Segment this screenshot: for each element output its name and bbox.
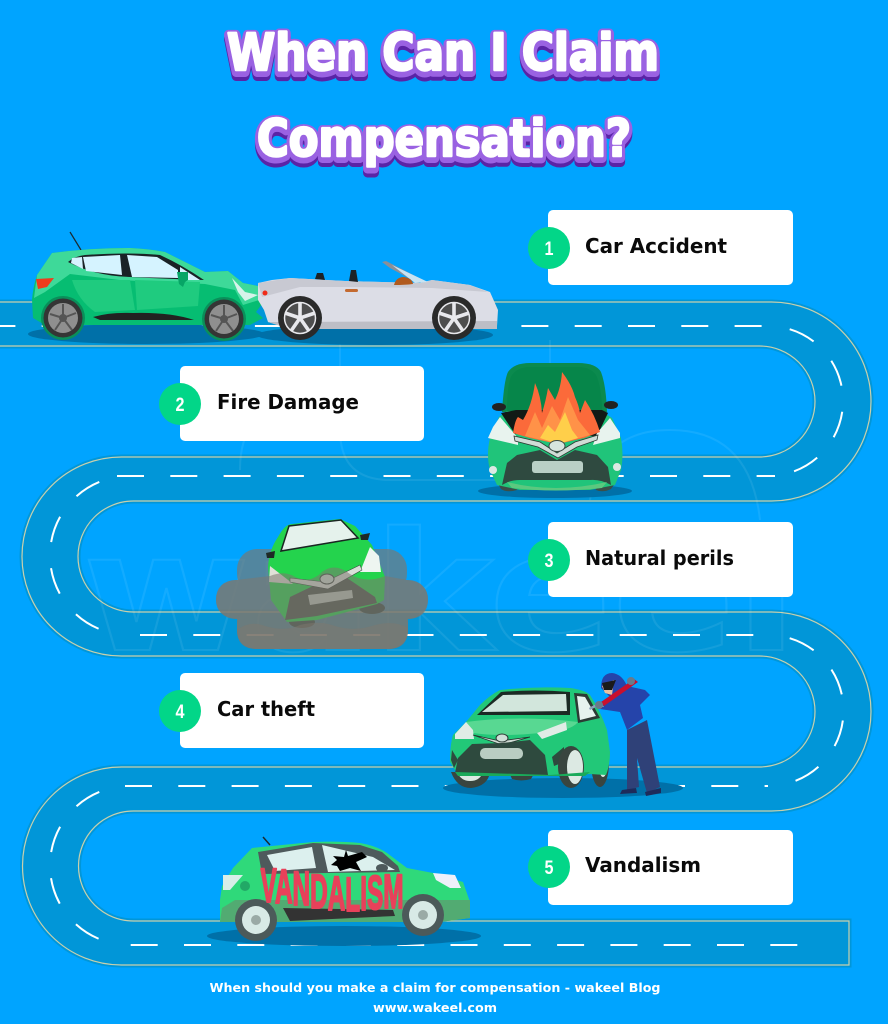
title [227,24,659,175]
graffiti: VANDALISM [260,860,404,922]
watermark: wakeel [82,497,798,689]
shattered window hole [331,850,367,871]
title line 2: Compensation? [257,112,631,171]
label 4: Car theft: Car theft [217,697,315,721]
label 2: Fire Damage [159,366,424,441]
flames [513,372,600,444]
illustration: green hatchback rear-ending grey convertible [28,232,498,345]
car [450,687,610,788]
title line 2: Compensation? [257,116,631,175]
label 3: Natural perils [528,522,793,597]
label 1: Car Accident: 1 [544,239,554,260]
label 2: Fire Damage: 2 [176,395,184,416]
label 5: Vandalism: 5 [544,858,554,879]
thief [589,673,661,796]
title line 1: When Can I Claim [227,24,659,83]
grey convertible [258,261,498,340]
footer: When should you make a claim for compensation - wakeel Blog [210,980,660,995]
label 4: Car theft: 4 [176,702,185,723]
smoke behind [216,549,428,649]
smoke front [216,567,428,649]
label 1: Car Accident [528,210,793,285]
illustration: vandalised car [207,837,481,946]
label 3: Natural perils: Natural perils [585,546,734,570]
label 3: Natural perils: 3 [544,551,554,572]
footer [210,980,660,1015]
road [0,302,871,965]
label 2: Fire Damage: Fire Damage [217,390,359,414]
title line 1: When Can I Claim [227,26,659,85]
label 5: Vandalism: Vandalism [585,853,701,877]
footer: www.wakeel.com [373,1000,497,1015]
title line 2: Compensation? [257,110,631,169]
illustration: thief breaking into car [443,673,683,798]
illustration: car with burning engine [478,363,632,498]
label 5: Vandalism [528,830,793,905]
green car [32,232,263,341]
label 1: Car Accident: Car Accident [585,234,727,258]
title line 1: When Can I Claim [227,30,659,89]
watermark [82,340,798,689]
illustration: wrecked car in smoke [216,519,428,649]
label 4: Car theft [159,673,424,748]
